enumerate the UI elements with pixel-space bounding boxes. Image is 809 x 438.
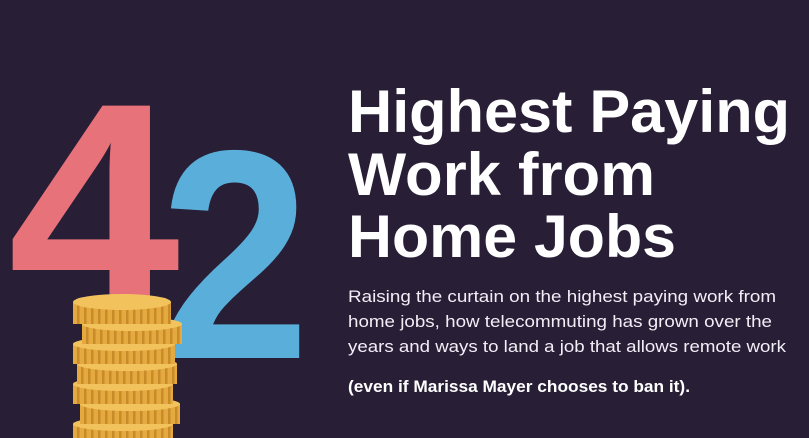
intro paragraph (348, 287, 787, 356)
title: Home Jobs (348, 203, 676, 270)
number 2: 2 (160, 89, 310, 422)
title: Highest Paying (348, 78, 790, 145)
title: Work from (348, 141, 655, 208)
bold note: (even if Marissa Mayer chooses to ban it). (348, 377, 690, 396)
title (348, 78, 790, 270)
intro paragraph: Raising the curtain on the highest paying work from (348, 287, 776, 306)
intro paragraph: home jobs, how telecommuting has grown over the (348, 312, 772, 331)
icon: coin stack (73, 294, 182, 438)
intro paragraph: years and ways to land a job that allows remote work (348, 337, 787, 356)
number 4: 4 (8, 40, 182, 376)
